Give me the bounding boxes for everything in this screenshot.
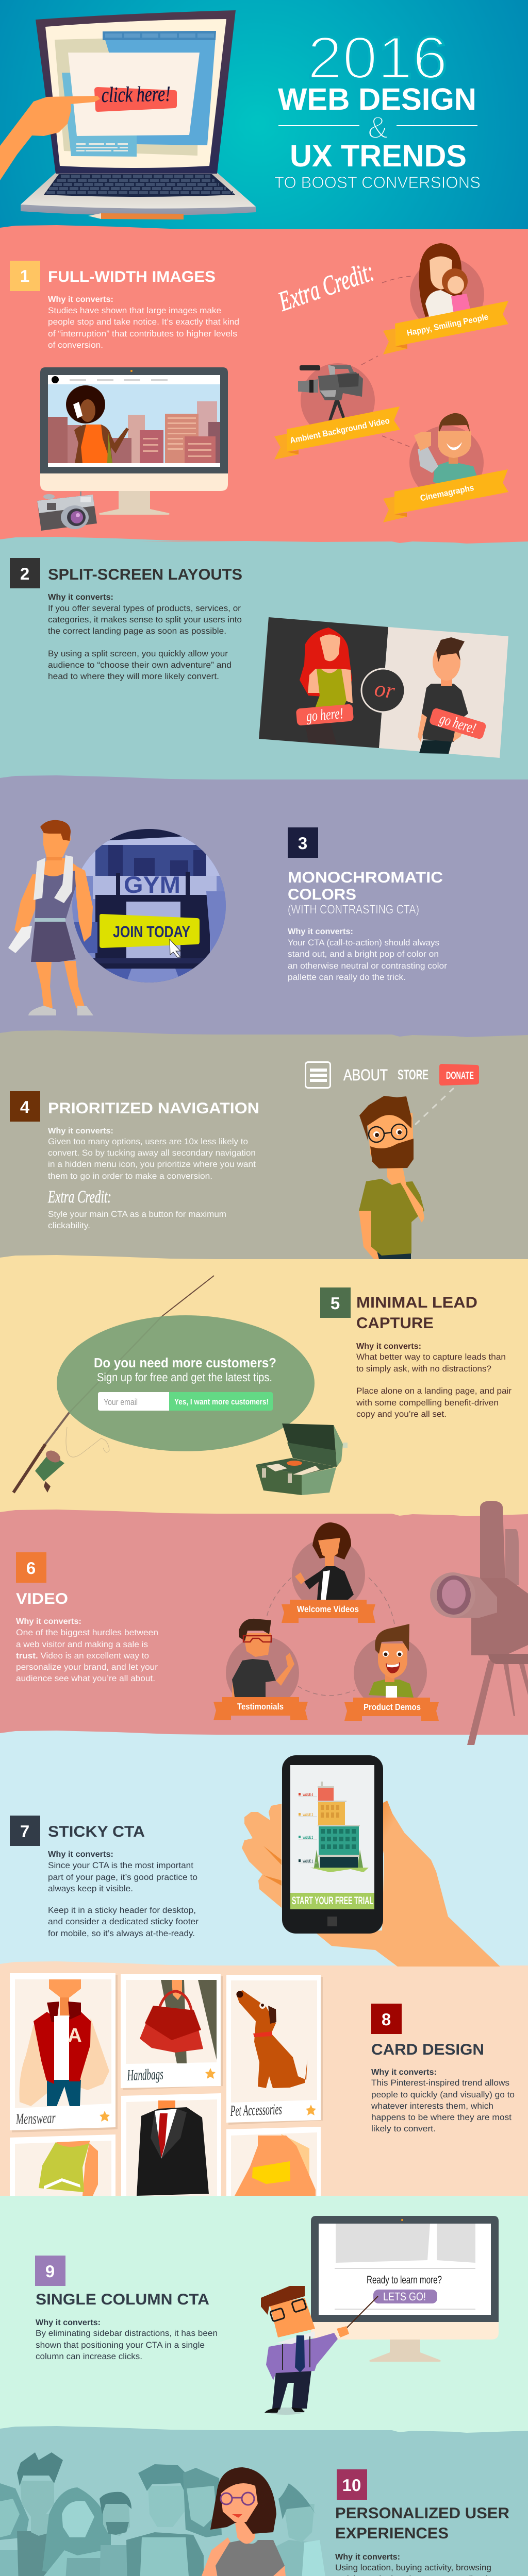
text block: Given too many options, users are 10x less likely to xyxy=(48,1137,248,1146)
gym circle illustration xyxy=(72,829,226,982)
text block: personalize your brand, and let your xyxy=(16,1663,158,1672)
text block: audience see what you’re all about. xyxy=(16,1674,155,1683)
text block: of “interruption” that contributes to higher levels xyxy=(48,329,237,338)
text block: to simply ask, with no distractions? xyxy=(356,1364,491,1374)
text block: Why it converts: xyxy=(48,1127,113,1136)
dashed triangle connectors xyxy=(267,1578,394,1696)
form headline xyxy=(94,1355,276,1384)
text block: and consider a dedicated sticky footer xyxy=(48,1917,199,1926)
heading: PRIORITIZED NAVIGATION xyxy=(48,1100,259,1117)
nav labels xyxy=(343,1066,428,1084)
woman behind xyxy=(183,2468,222,2537)
badge 7 xyxy=(10,1816,40,1846)
badge 5: 5 xyxy=(331,1294,340,1313)
text block: in a hidden menu icon, you prioritize where you want xyxy=(48,1160,256,1169)
heading: FULL-WIDTH IMAGES xyxy=(48,268,216,285)
donate button xyxy=(439,1064,479,1086)
extra credit: cinemagraphs: Cinemagraphs xyxy=(419,483,475,503)
dashed connectors xyxy=(361,276,412,447)
icon: cursor xyxy=(170,939,180,957)
title: TO BOOST CONVERSIONS xyxy=(274,173,481,192)
navigation bar xyxy=(305,1062,479,1088)
or circle xyxy=(361,669,405,712)
heading xyxy=(288,869,443,917)
tackle box xyxy=(256,1423,348,1495)
handbags label: Handbags xyxy=(127,2066,163,2084)
crowd of faded people xyxy=(0,2452,330,2576)
extra credit: ambient background video xyxy=(274,363,400,460)
text block: whatever interests them, which xyxy=(371,2102,493,2111)
panel: 8 card design xyxy=(10,1973,515,2196)
product demos character: Product Demos xyxy=(364,1702,421,1712)
thinking bearded man xyxy=(359,1096,424,1259)
badge 3 xyxy=(288,827,318,858)
split-screen illustration xyxy=(259,617,508,758)
text block: part of your page, it’s good practice to xyxy=(48,1873,197,1882)
text block xyxy=(335,2553,507,2576)
badge 1 xyxy=(10,261,40,291)
text block: One of the biggest hurdles between xyxy=(16,1628,158,1637)
heading: PERSONALIZED USER xyxy=(335,2505,509,2522)
badge 4: 4 xyxy=(20,1097,30,1116)
tower chart xyxy=(310,1782,369,1872)
heading: VIDEO xyxy=(16,1590,68,1607)
text block xyxy=(48,1850,199,1938)
heading: CAPTURE xyxy=(356,1315,434,1332)
monitor with single column page xyxy=(311,2216,499,2362)
text block: Why it converts: xyxy=(48,593,113,602)
text block: stand out, and a bright pop of color on xyxy=(288,950,439,959)
text block xyxy=(48,1127,256,1181)
heading: STICKY CTA xyxy=(48,1823,145,1840)
text block: shown that positioning your CTA in a single xyxy=(36,2341,205,2350)
icon: photo camera xyxy=(37,492,97,531)
form headline: Sign up for free and get the latest tips. xyxy=(97,1370,272,1384)
text block: people to quickly (and visually) go to xyxy=(371,2090,515,2099)
text block: Using location, buying activity, browsing xyxy=(335,2563,491,2572)
heading: MINIMAL LEAD xyxy=(356,1294,477,1311)
title: & xyxy=(368,110,388,145)
text block: people stop and take notice. It’s exactly that kind xyxy=(48,317,239,327)
panel: 10 personalized user experiences xyxy=(0,2452,509,2576)
text block: Why it converts: xyxy=(48,1850,113,1859)
text block: column can increase clicks. xyxy=(36,2352,142,2361)
text block: Why it converts: xyxy=(288,927,353,936)
badge 5 xyxy=(320,1287,351,1318)
text block: an otherwise neutral or contrasting color xyxy=(288,961,448,971)
testimonials character xyxy=(213,1619,308,1720)
extra credit: happy smiling people xyxy=(383,243,508,354)
text block: always keep it visible. xyxy=(48,1884,133,1893)
go here button right xyxy=(428,707,487,740)
panel: header xyxy=(0,10,481,219)
chart legend: VALUE 3 xyxy=(303,1812,313,1817)
chart legend xyxy=(299,1792,317,1863)
text block: By eliminating sidebar distractions, it has been xyxy=(36,2329,218,2338)
presenter man xyxy=(261,2286,378,2415)
card: handbags xyxy=(121,1974,223,2090)
text block xyxy=(48,295,239,350)
text block: If you offer several types of products, services, or xyxy=(48,604,241,613)
panel: 7 sticky cta xyxy=(10,1755,500,1967)
panel: 3 monochromatic colors xyxy=(8,820,448,1015)
text block: them to go in order to make a conversion. xyxy=(48,1172,212,1181)
join today button: JOIN TODAY xyxy=(113,923,190,941)
extra credit: happy smiling people: Happy, Smiling People xyxy=(406,312,489,338)
card: pet accessories xyxy=(226,1975,323,2125)
card grid xyxy=(10,1973,323,2196)
form headline: Do you need more customers? xyxy=(94,1355,276,1370)
split-screen man xyxy=(418,637,468,754)
text block: Why it converts: xyxy=(356,1342,421,1351)
product demos character xyxy=(344,1624,439,1721)
text block: categories, it makes sense to split your users into xyxy=(48,615,242,624)
text block xyxy=(36,2318,218,2361)
go here button right: go here! xyxy=(438,710,478,737)
heading: COLORS xyxy=(288,886,356,903)
text block: likely to convert. xyxy=(371,2124,436,2133)
text block xyxy=(16,1617,158,1683)
email form: Your email xyxy=(104,1397,138,1407)
hand holding phone xyxy=(242,1755,500,1967)
text block: Keep it in a sticky header for desktop, xyxy=(48,1906,196,1915)
gym sign: GYM xyxy=(124,871,180,898)
title: WEB DESIGN xyxy=(278,82,476,116)
text block xyxy=(48,593,242,681)
far left girl xyxy=(0,2483,29,2576)
join today button xyxy=(100,914,200,948)
phone xyxy=(282,1755,383,1934)
text block: head to where they will more likely convert. xyxy=(48,672,219,681)
title: 2016 xyxy=(307,24,448,91)
panel: 2 split-screen layouts xyxy=(10,558,508,758)
text block: of conversion. xyxy=(48,341,103,350)
icon: hamburger menu xyxy=(305,1062,330,1088)
chart legend: VALUE 4 xyxy=(303,1792,313,1797)
fishing rod xyxy=(13,1276,214,1493)
extra credit: Style your main CTA as a button for maximum xyxy=(48,1210,226,1219)
go here button left: go here! xyxy=(306,705,344,725)
text block: By using a split screen, you quickly allow your xyxy=(48,649,228,658)
card: menswear: A xyxy=(68,2025,82,2046)
sticky cta strip: START YOUR FREE TRIAL xyxy=(292,1895,373,1907)
or circle: or xyxy=(373,676,397,704)
text block: copy and you’re all set. xyxy=(356,1410,447,1419)
chart legend: VALUE 2 xyxy=(303,1835,313,1840)
text block: This Pinterest-inspired trend allows xyxy=(371,2078,509,2088)
badge 10 xyxy=(337,2469,367,2500)
menswear label xyxy=(15,2109,110,2128)
heading xyxy=(335,2505,509,2542)
chart legend: VALUE 1 xyxy=(303,1859,313,1863)
badge 3: 3 xyxy=(298,834,307,853)
email form: Yes, I want more customers! xyxy=(174,1398,269,1406)
extra credit: Extra Credit: xyxy=(47,1188,111,1207)
badge 9 xyxy=(35,2256,65,2286)
badge 6: 6 xyxy=(26,1558,36,1578)
extra credit xyxy=(47,1188,226,1230)
extra credit: clickability. xyxy=(48,1221,90,1230)
email form xyxy=(98,1392,273,1411)
handbags label xyxy=(127,2066,216,2084)
icon: laptop with click here button: click here! xyxy=(101,82,171,107)
pet accessories label: Pet Accessories xyxy=(230,2101,282,2120)
sticky cta strip xyxy=(290,1893,374,1909)
text block: Your CTA (call-to-action) should always xyxy=(288,938,439,947)
monitor with single column page: Ready to learn more? xyxy=(367,2274,442,2286)
badge 10: 10 xyxy=(342,2476,361,2495)
text block: pallette can really do the trick. xyxy=(288,973,406,982)
form ellipse xyxy=(57,1315,315,1451)
heading: SPLIT-SCREEN LAYOUTS xyxy=(48,566,242,583)
welcome videos character: Welcome Videos xyxy=(297,1604,359,1614)
gym man xyxy=(8,820,93,1015)
text block: with some compelling benefit-driven xyxy=(356,1398,499,1408)
text block: happens to be where they are most xyxy=(371,2113,512,2122)
text block: Why it converts: xyxy=(371,2068,437,2077)
text block: What better way to capture leads than xyxy=(356,1352,506,1362)
heading: SINGLE COLUMN CTA xyxy=(36,2291,209,2308)
badge 7: 7 xyxy=(20,1822,29,1841)
extra credit: ambient background video: Ambient Background Video xyxy=(289,416,390,446)
text block: trust. Video is an excellent way to xyxy=(16,1651,149,1660)
title: UX TRENDS xyxy=(290,139,467,173)
card: swimwear xyxy=(226,2127,321,2196)
icon: pointing hand xyxy=(0,96,100,180)
text block: a web visitor and making a sale is xyxy=(16,1640,148,1649)
testimonials character: Testimonials xyxy=(237,1702,284,1711)
extra credit lettering: Extra Credit: xyxy=(274,256,378,317)
heading: MONOCHROMATIC xyxy=(288,869,443,886)
panel: 1 full-width images xyxy=(10,243,508,531)
projector xyxy=(430,1501,528,1745)
icon: laptop with click here button xyxy=(21,10,256,219)
badge 2 xyxy=(10,558,40,588)
menswear label: Menswear xyxy=(15,2109,56,2128)
text block xyxy=(288,927,448,982)
nav labels: ABOUT xyxy=(343,1066,388,1084)
text block: Since your CTA is the most important xyxy=(48,1861,193,1870)
badge 1: 1 xyxy=(20,266,29,285)
badge 9: 9 xyxy=(45,2262,55,2281)
badge 8 xyxy=(371,2004,402,2034)
panel: 6 video xyxy=(16,1501,528,1745)
text block xyxy=(356,1342,512,1419)
text block: Why it converts: xyxy=(48,295,113,304)
main woman xyxy=(200,2467,288,2576)
badge 6 xyxy=(16,1552,46,1583)
girl with long hair xyxy=(42,2487,121,2576)
right man with towel xyxy=(268,2483,330,2576)
bearded man xyxy=(98,2492,135,2576)
welcome videos character xyxy=(282,1522,375,1623)
card: menswear xyxy=(10,1973,118,2132)
text block: Why it converts: xyxy=(36,2318,101,2327)
text block: Why it converts: xyxy=(16,1617,81,1626)
panel: 5 minimal lead capture xyxy=(13,1276,512,1495)
heading xyxy=(356,1294,477,1332)
card: suit xyxy=(121,2093,221,2196)
donate button: DONATE xyxy=(446,1070,474,1081)
center man xyxy=(126,2464,204,2576)
lets go button: LETS GO! xyxy=(383,2290,426,2303)
text block: audience to “choose their own adventure” and xyxy=(48,660,232,670)
text block: for mobile, so it’s always at-the-ready. xyxy=(48,1929,195,1938)
heading: (WITH CONTRASTING CTA) xyxy=(288,903,419,917)
monitor with woman on city photo xyxy=(40,367,228,515)
text block xyxy=(371,2068,515,2133)
card: womens top xyxy=(10,2134,116,2196)
text block: Studies have shown that large images make xyxy=(48,306,221,315)
extra credit: cinemagraphs xyxy=(383,413,508,522)
heading: CARD DESIGN xyxy=(371,2041,484,2058)
badge 4 xyxy=(10,1091,40,1122)
badge 2: 2 xyxy=(20,564,29,583)
split-screen woman xyxy=(300,628,353,744)
text block: Why it converts: xyxy=(335,2553,400,2562)
title xyxy=(274,24,481,192)
nav labels: STORE xyxy=(398,1067,428,1082)
text block: Place alone on a landing page, and pair xyxy=(356,1386,512,1396)
panel: 4 prioritized navigation xyxy=(10,1062,479,1259)
panel: 9 single column cta xyxy=(35,2216,499,2415)
heading: EXPERIENCES xyxy=(335,2525,449,2542)
text block: convert. So by tucking away all secondary navigation xyxy=(48,1148,256,1158)
spiky hair man xyxy=(17,2452,63,2576)
text block: the correct landing page as soon as possible. xyxy=(48,626,226,636)
badge 8: 8 xyxy=(382,2010,391,2029)
dashed connector xyxy=(415,1088,454,1125)
